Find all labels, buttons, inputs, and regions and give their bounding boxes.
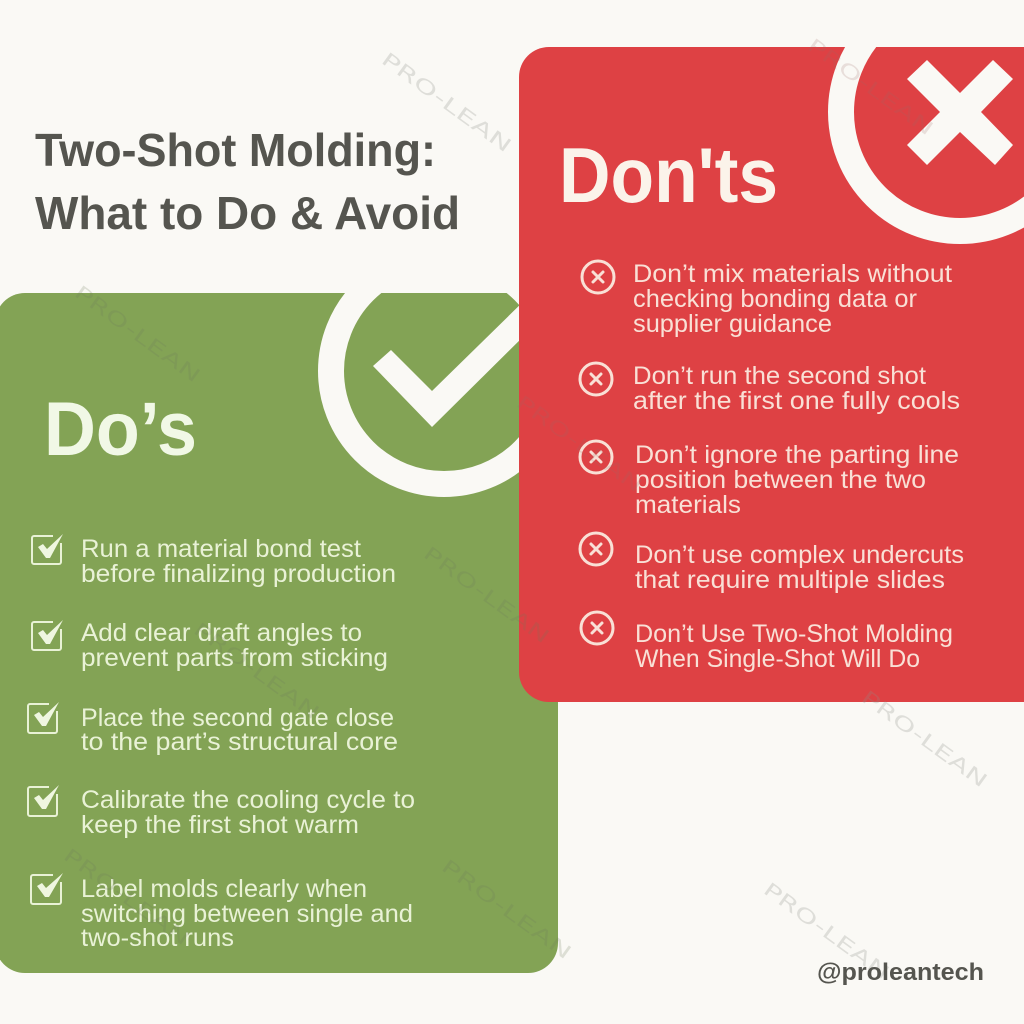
- item: label molds: Label molds clearly when: [81, 875, 367, 903]
- heading: do's: Do’s: [44, 387, 197, 472]
- panel: don'ts: [519, 0, 1024, 702]
- icon: large check in circle: [318, 293, 519, 497]
- item: label molds: [31, 873, 413, 952]
- item: mix materials: [582, 260, 952, 338]
- item: material bond test: [32, 534, 396, 588]
- item: mix materials: Don’t mix materials without: [633, 260, 952, 288]
- item: second shot: Don’t run the second shot: [633, 362, 926, 390]
- watermarks: PRO-LEAN: [857, 686, 991, 792]
- item: material bond test: Run a material bond test: [81, 535, 361, 563]
- icon: large x in circle: [841, 0, 1024, 231]
- watermarks: PRO-LEAN: [59, 844, 193, 950]
- item: parting line: position between the two: [635, 466, 926, 494]
- watermarks: PRO-LEAN: [437, 855, 575, 964]
- title: Two-Shot Molding:: [35, 124, 436, 176]
- item: mix materials: checking bonding data or: [633, 285, 917, 313]
- item: material bond test: before finalizing production: [81, 560, 396, 588]
- item: mix materials: supplier guidance: [633, 310, 832, 338]
- item: draft angles: prevent parts from sticking: [81, 644, 388, 672]
- item: second shot: after the first one fully cools: [633, 387, 960, 415]
- item: cooling cycle: Calibrate the cooling cycle to: [81, 786, 415, 814]
- item: single-shot: Don’t Use Two-Shot Molding: [635, 620, 953, 648]
- social handle: @proleantech: [817, 959, 984, 986]
- title: [35, 124, 460, 239]
- item: draft angles: [32, 619, 388, 672]
- watermarks: PRO-LEAN: [189, 618, 323, 724]
- item: parting line: [580, 441, 959, 519]
- watermarks: PRO-LEAN: [512, 391, 646, 497]
- item: undercuts: Don’t use complex undercuts: [635, 541, 964, 569]
- item: undercuts: that require multiple slides: [635, 566, 945, 594]
- item: undercuts: [580, 533, 964, 594]
- watermarks: PRO-LEAN: [377, 48, 515, 157]
- item: second gate: [28, 702, 398, 756]
- heading: don'ts: Don'ts: [559, 131, 778, 219]
- item: cooling cycle: keep the first shot warm: [81, 811, 359, 839]
- item: label molds: two-shot runs: [81, 924, 234, 952]
- title: What to Do & Avoid: [35, 187, 460, 239]
- panel: do's: [0, 258, 558, 973]
- item: draft angles: Add clear draft angles to: [81, 619, 362, 647]
- item: single-shot: [581, 612, 953, 673]
- item: label molds: switching between single and: [81, 900, 413, 928]
- item: second shot: [580, 362, 960, 415]
- item: parting line: Don’t ignore the parting line: [635, 441, 959, 469]
- watermarks: PRO-LEAN: [759, 878, 893, 984]
- item: cooling cycle: [28, 785, 415, 839]
- item: second gate: to the part’s structural core: [81, 728, 398, 756]
- item: second gate: Place the second gate close: [81, 704, 394, 732]
- watermarks: PRO-LEAN: [419, 542, 553, 648]
- item: single-shot: When Single-Shot Will Do: [635, 645, 920, 673]
- watermarks: PRO-LEAN: [803, 34, 937, 140]
- watermarks: PRO-LEAN: [70, 281, 204, 387]
- item: parting line: materials: [635, 491, 741, 519]
